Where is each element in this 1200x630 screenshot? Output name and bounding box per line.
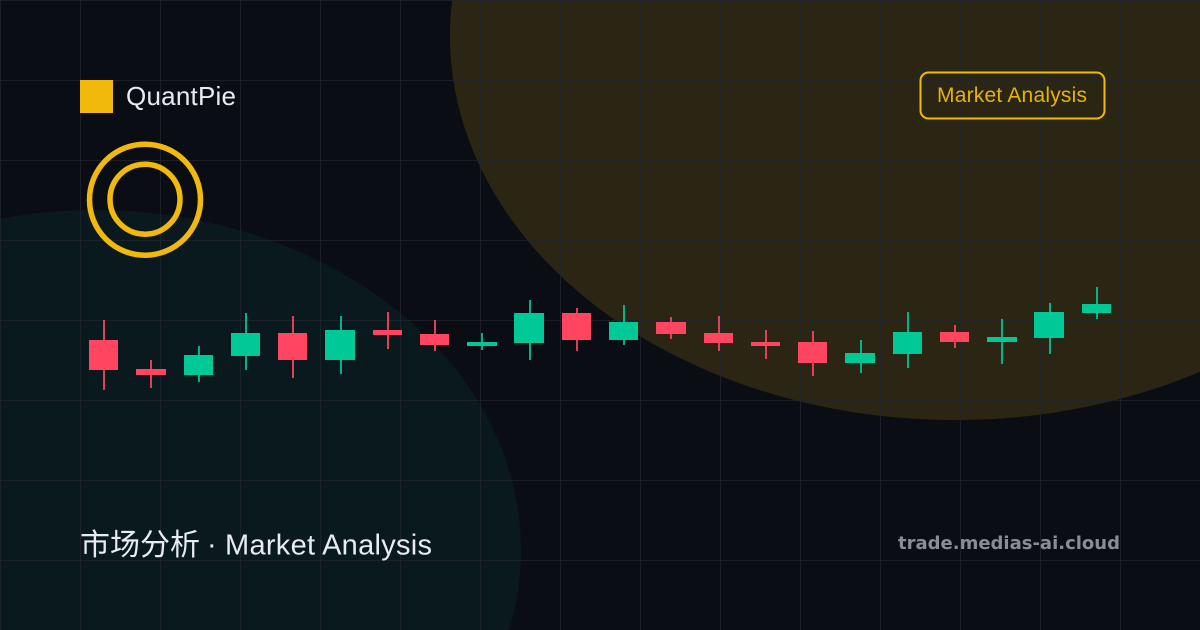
candle 12 xyxy=(609,305,638,345)
candle 4 xyxy=(231,313,260,370)
candle 13 xyxy=(656,317,686,339)
title separator: · xyxy=(207,529,217,561)
candle 17 xyxy=(845,340,875,373)
candle 15 xyxy=(751,330,780,359)
candle 14 xyxy=(704,316,733,351)
badge: Market Analysis xyxy=(920,72,1104,118)
candle 10 xyxy=(514,300,544,360)
candle 2 xyxy=(136,360,166,388)
teal background ellipse xyxy=(0,210,521,630)
candle 3 xyxy=(184,346,213,382)
candle 22 xyxy=(1082,287,1111,319)
candle 19 xyxy=(940,325,969,348)
candle 20 xyxy=(987,319,1017,364)
candle 5 xyxy=(278,316,307,378)
brand logo xyxy=(80,80,236,113)
title English part: Market Analysis xyxy=(225,530,432,562)
candle 18 xyxy=(893,312,922,368)
badge: Market Analysis: Market Analysis xyxy=(937,84,1087,107)
candle 11 xyxy=(562,308,591,351)
candle 21 xyxy=(1034,303,1064,354)
candle 8 xyxy=(420,320,449,351)
title xyxy=(80,529,432,562)
candle 9 xyxy=(467,333,497,350)
yellow background ellipse xyxy=(450,0,1200,420)
brand name: QuantPie xyxy=(126,81,236,111)
candle 6 xyxy=(325,316,355,374)
logo square xyxy=(80,80,113,113)
candle 16 xyxy=(798,331,827,376)
title Chinese part: 市场分析 xyxy=(80,529,200,562)
candle 1 xyxy=(89,320,118,390)
candle 7 xyxy=(373,312,402,349)
icon: concentric rings xyxy=(90,144,200,255)
domain footer: trade.medias-ai.cloud xyxy=(898,533,1120,554)
candlestick chart xyxy=(89,287,1111,390)
